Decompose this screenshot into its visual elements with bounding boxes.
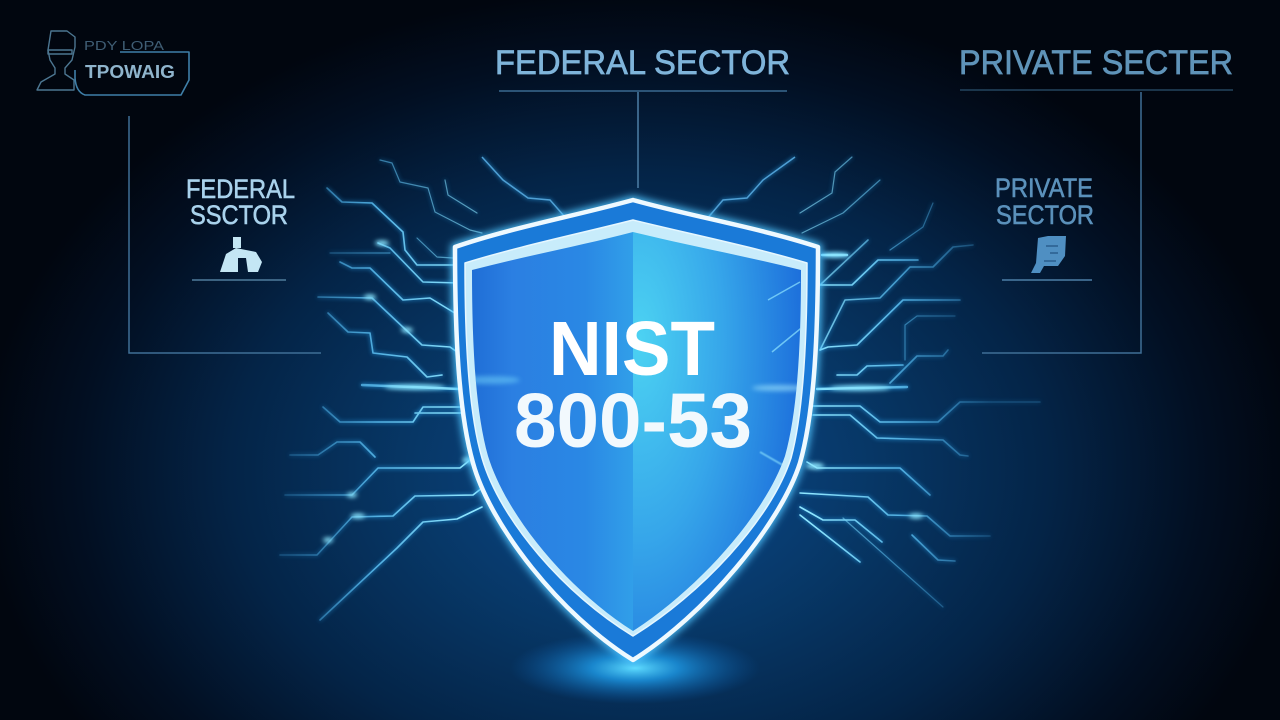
tag outline — [75, 52, 189, 95]
title: NIST 800-53: 800-53 — [514, 378, 752, 464]
tag label: TPOWAIG — [85, 62, 175, 82]
panel: private sector — [995, 173, 1094, 280]
label line 2: SECTOR — [996, 200, 1094, 230]
title: NIST 800-53 — [514, 306, 752, 464]
label: FEDERAL — [186, 174, 295, 204]
shield inner rim — [465, 220, 807, 636]
circuit traces: right — [800, 157, 1040, 607]
connector: left bracket — [129, 116, 321, 353]
icon: building — [220, 237, 262, 272]
floor glow — [510, 632, 760, 704]
shield — [455, 200, 818, 660]
shield halo — [455, 200, 818, 660]
tag caption: PDY LOPA — [84, 38, 164, 53]
icon: document — [1031, 236, 1066, 273]
label line 2: SSCTOR — [190, 200, 288, 230]
underline — [1002, 279, 1092, 281]
label: PRIVATE — [995, 173, 1093, 203]
title: NIST 800-53: NIST — [549, 306, 715, 392]
header: private sector: PRIVATE SECTER — [959, 44, 1233, 82]
circuit traces: top — [482, 157, 795, 227]
circuit traces: left — [280, 160, 482, 620]
shield light flares — [476, 282, 800, 466]
badge: top-left person tag — [37, 31, 189, 95]
icon: person outline — [37, 31, 75, 90]
panel: federal sector — [186, 174, 295, 280]
connector: top centre — [637, 92, 639, 188]
shield right face — [633, 232, 801, 631]
underline — [192, 279, 286, 281]
shield left face — [472, 232, 633, 631]
header: federal sector: FEDERAL SECTOR — [495, 44, 790, 82]
shield outer band — [455, 200, 818, 660]
connector: right bracket — [982, 92, 1141, 353]
glow nodes on traces — [323, 240, 923, 542]
